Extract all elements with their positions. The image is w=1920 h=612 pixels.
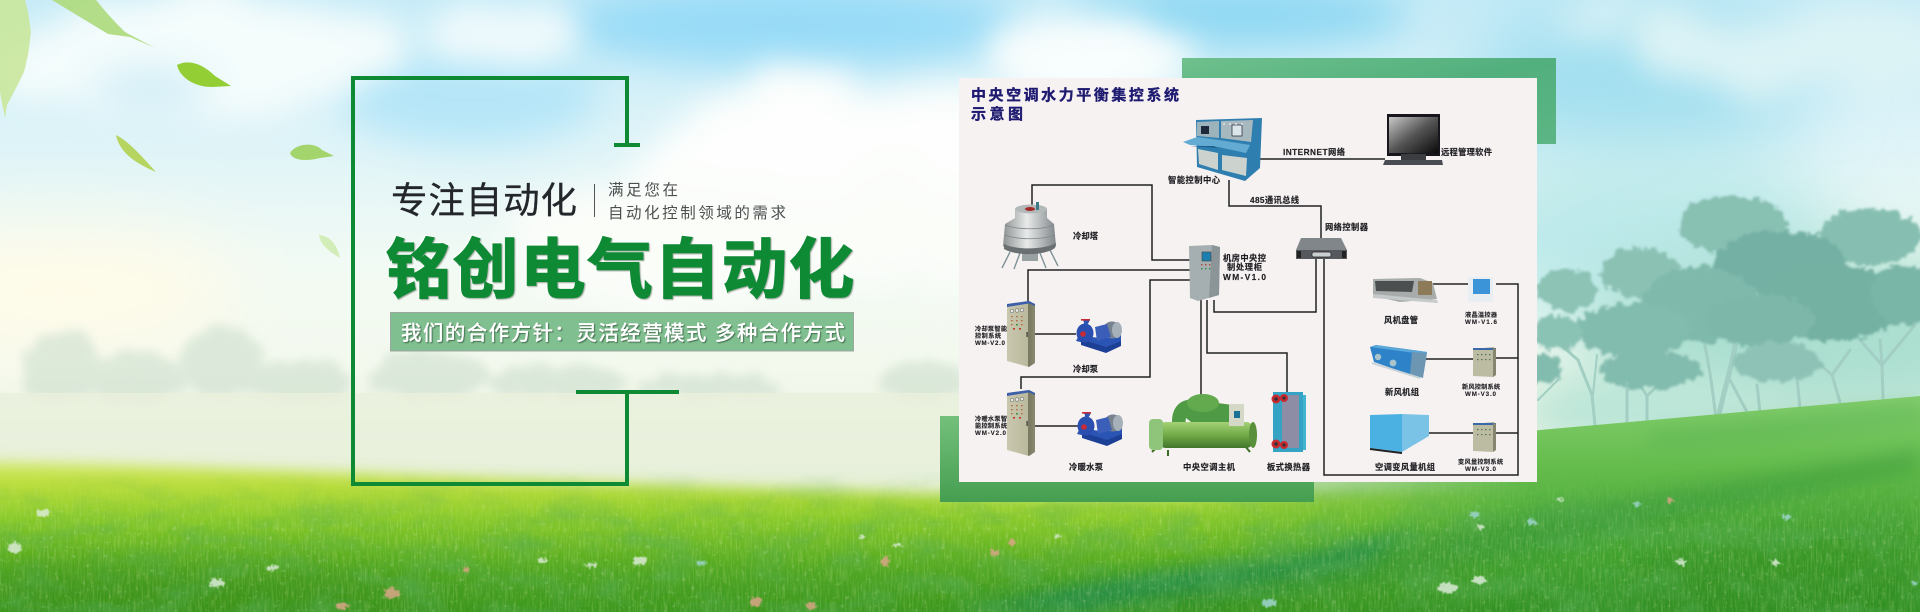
icon: fresh air unit bbox=[1370, 345, 1427, 379]
diagram labels: 机房中央控 bbox=[1223, 253, 1267, 263]
diagram labels: WM-V1.0 bbox=[1223, 272, 1266, 282]
icon: pale green leaf bbox=[290, 145, 334, 160]
diagram labels: 板式换热器 bbox=[1267, 462, 1311, 472]
diagram labels: 能控制系统 bbox=[975, 422, 1008, 430]
equipment illustrations bbox=[1002, 114, 1496, 456]
panel: HVAC system diagram bbox=[959, 78, 1537, 482]
diagram labels: 冷却泵 bbox=[1073, 364, 1099, 374]
text block: meet your needs bbox=[608, 181, 786, 222]
icon: falling leaves bbox=[0, 0, 340, 258]
panel: green back plate top right bbox=[1182, 58, 1556, 144]
background: meadow flowers bbox=[8, 498, 1917, 610]
icon: fan coil unit bbox=[1373, 278, 1438, 303]
diagram labels: 新风机组 bbox=[1385, 387, 1420, 397]
icon: cooling pump bbox=[1076, 319, 1122, 353]
diagram labels: WM-V3.0 bbox=[1465, 466, 1497, 473]
icon: cooling pump cabinet bbox=[1007, 301, 1035, 367]
icon: LCD thermostat bbox=[1468, 277, 1493, 302]
wiring lines bbox=[1021, 159, 1518, 475]
diagram labels: 空调变风量机组 bbox=[1375, 462, 1436, 472]
diagram labels: 制处理柜 bbox=[1227, 262, 1263, 272]
diagram title bbox=[971, 86, 1179, 123]
diagram labels: 485通讯总线 bbox=[1250, 195, 1300, 205]
background: pale foreground haze bbox=[0, 393, 960, 463]
text block: meet your needs: 满足您在 bbox=[608, 181, 678, 199]
diagram labels: 变风量控制系统 bbox=[1458, 458, 1504, 466]
diagram labels: 冷却泵智能 bbox=[975, 325, 1008, 333]
diagram labels: WM-V3.0 bbox=[1465, 391, 1497, 398]
icon: central chiller bbox=[1149, 394, 1257, 456]
icon: central control cabinet bbox=[1189, 245, 1220, 301]
icon: plate heat exchanger bbox=[1272, 392, 1306, 452]
diagram labels: 智能控制中心 bbox=[1168, 175, 1221, 185]
diagram labels: WM-V1.6 bbox=[1465, 319, 1498, 326]
icon: chilled water pump bbox=[1077, 412, 1123, 446]
diagram labels: 新风控制系统 bbox=[1462, 383, 1501, 391]
panel: green text frame bbox=[351, 76, 679, 486]
heading: focus on automation: 专注自动化 bbox=[391, 180, 577, 221]
diagram labels: 风机盘管 bbox=[1384, 315, 1418, 325]
diagram labels: 控制系统 bbox=[975, 332, 1002, 340]
divider between slogan texts bbox=[594, 184, 595, 217]
title: company name: 铭创电气自动化 bbox=[386, 233, 854, 306]
diagram labels: 液晶温控器 bbox=[1465, 311, 1498, 319]
diagram labels bbox=[975, 147, 1504, 473]
diagram labels: 远程管理软件 bbox=[1441, 147, 1493, 157]
background: grass meadow bbox=[0, 396, 1920, 612]
diagram labels: 冷却塔 bbox=[1073, 231, 1099, 241]
background: tree group at right bbox=[1524, 196, 1920, 425]
icon: thin yellow leaf bbox=[116, 135, 156, 172]
diagram labels: 中央空调主机 bbox=[1183, 462, 1236, 472]
diagram labels: WM-V2.0 bbox=[975, 340, 1006, 347]
text block: meet your needs: 自动化控制领域的需求 bbox=[608, 204, 786, 222]
icon: long leaf at top bbox=[52, 0, 155, 48]
icon: network controller bbox=[1296, 238, 1347, 259]
banner: cooperation policy bbox=[390, 312, 854, 351]
diagram labels: 冷暖水泵智 bbox=[975, 415, 1007, 423]
icon: faint leaf bbox=[319, 235, 340, 258]
icon: big leaf at left edge bbox=[0, 0, 31, 118]
diagram labels: 冷暖水泵 bbox=[1069, 462, 1104, 472]
diagram labels: INTERNET网络 bbox=[1283, 147, 1346, 157]
icon: monitor and keyboard bbox=[1383, 114, 1443, 165]
banner: cooperation policy: 我们的合作方针：灵活经营模式 多种合作方式 bbox=[401, 322, 845, 345]
diagram title: 中央空调水力平衡集控系统 bbox=[971, 86, 1179, 104]
diagram labels: WM-V2.0 bbox=[975, 430, 1007, 437]
diagram labels: 网络控制器 bbox=[1325, 222, 1369, 232]
icon: system cabinet for VAV bbox=[1473, 422, 1496, 452]
panel: green back plate bottom left bbox=[940, 416, 1314, 502]
icon: cooling tower bbox=[1002, 202, 1058, 269]
background: distant hazy tree line bbox=[21, 326, 970, 406]
icon: variable air volume unit bbox=[1370, 414, 1429, 454]
icon: chilled water pump cabinet bbox=[1007, 390, 1035, 456]
icon: control console bbox=[1183, 118, 1262, 181]
diagram title: 示意图 bbox=[971, 105, 1023, 123]
icon: system cabinet for fresh air bbox=[1473, 347, 1496, 377]
icon: bright green leaf bbox=[177, 62, 231, 87]
